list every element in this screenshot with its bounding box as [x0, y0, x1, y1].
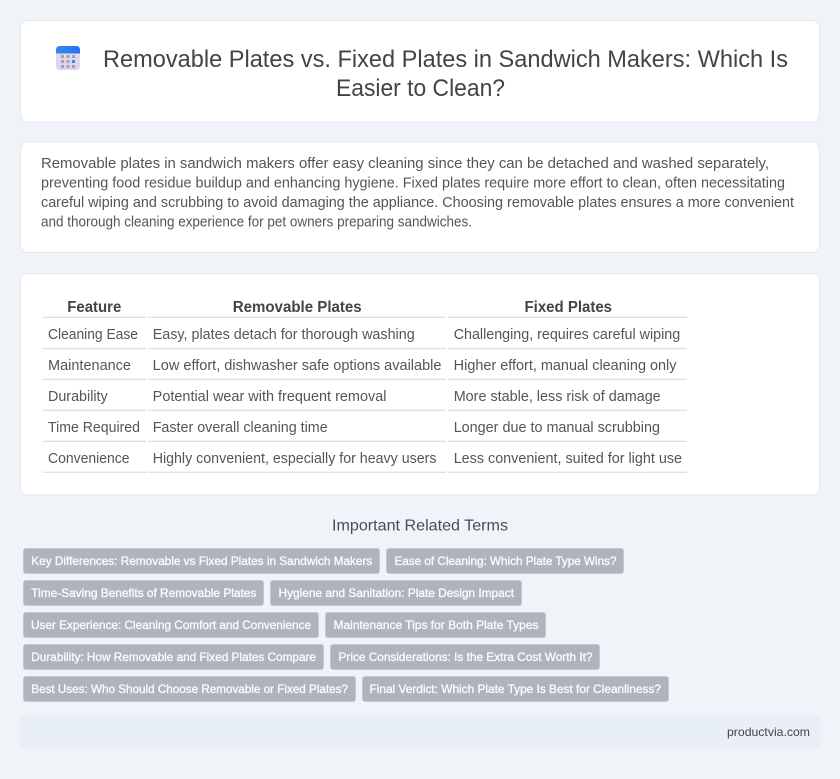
table row: durability: More stable, less risk of damage — [454, 389, 661, 405]
icon: calendar — [56, 46, 80, 70]
tag — [386, 548, 624, 574]
tag: User Experience: Cleaning Comfort and Convenience — [31, 618, 311, 632]
table row: maintenance — [48, 358, 677, 374]
panel: related term tags — [24, 548, 668, 702]
table row: cleaning ease: Cleaning Ease — [48, 327, 138, 343]
text block: summary paragraph — [41, 156, 794, 230]
tag — [24, 644, 324, 670]
text block: summary paragraph: careful wiping and scrubbing to avoid damaging the appliance. Choosing removable plates ensures a more convenient — [41, 195, 794, 211]
table header: Feature — [67, 299, 121, 316]
table row: time required: Time Required — [48, 420, 140, 436]
tag: Best Uses: Who Should Choose Removable or Fixed Plates? — [31, 682, 348, 696]
table header: Removable Plates — [233, 299, 362, 316]
table row: durability — [48, 389, 661, 405]
footer: productvia.com — [727, 725, 810, 739]
tag — [24, 676, 356, 702]
table row: maintenance: Higher effort, manual cleaning only — [454, 358, 677, 374]
table row: time required — [48, 420, 660, 436]
tag — [24, 580, 264, 606]
heading: important related terms: Important Related Terms — [332, 518, 508, 534]
title: Removable Plates vs. Fixed Plates in Sandwich Makers: Which Is — [103, 46, 788, 73]
tag — [24, 548, 380, 574]
panel: comparison table — [20, 274, 820, 495]
tag: Key Differences: Removable vs Fixed Plates in Sandwich Makers — [31, 554, 372, 568]
table row: maintenance: Low effort, dishwasher safe options available — [153, 358, 441, 374]
tag: Time-Saving Benefits of Removable Plates — [31, 586, 256, 600]
title — [103, 46, 788, 102]
table row: time required: Faster overall cleaning time — [153, 420, 328, 436]
tag: Maintenance Tips for Both Plate Types — [334, 618, 538, 632]
tag: Ease of Cleaning: Which Plate Type Wins? — [394, 554, 617, 568]
panel: summary — [20, 142, 820, 252]
tag — [362, 676, 668, 702]
table row: cleaning ease — [48, 327, 680, 343]
tag: Price Considerations: Is the Extra Cost Worth It? — [338, 650, 593, 664]
tag: Final Verdict: Which Plate Type Is Best for Cleanliness? — [370, 682, 661, 696]
tag — [270, 580, 522, 606]
table row: time required: Longer due to manual scrubbing — [454, 420, 660, 436]
title: Easier to Clean? — [336, 75, 505, 102]
text block: summary paragraph: Removable plates in sandwich makers offer easy cleaning since they can be detached and washed separately, — [41, 156, 769, 172]
table header — [67, 299, 612, 316]
table row: cleaning ease: Challenging, requires careful wiping — [454, 327, 680, 343]
tag — [24, 612, 318, 638]
tag — [330, 644, 600, 670]
text block: summary paragraph: and thorough cleaning experience for pet owners preparing sandwiches. — [41, 214, 472, 230]
tag: Durability: How Removable and Fixed Plates Compare — [31, 650, 316, 664]
tag — [326, 612, 546, 638]
footer — [20, 715, 820, 749]
table row: convenience: Less convenient, suited for light use — [454, 451, 682, 467]
table row: durability: Potential wear with frequent removal — [153, 389, 386, 405]
table row: convenience: Highly convenient, especially for heavy users — [153, 451, 436, 467]
table header: Fixed Plates — [524, 299, 612, 316]
table row: cleaning ease: Easy, plates detach for thorough washing — [153, 327, 415, 343]
tag: Hygiene and Sanitation: Plate Design Impact — [278, 586, 515, 600]
table row: maintenance: Maintenance — [48, 358, 131, 374]
table row: durability: Durability — [48, 389, 108, 405]
text block: summary paragraph: preventing food residue buildup and enhancing hygiene. Fixed plates require more effort to clean, often necessitating — [41, 176, 785, 192]
panel: header — [20, 20, 820, 122]
table row: convenience: Convenience — [48, 451, 130, 467]
table row: convenience — [48, 451, 682, 467]
